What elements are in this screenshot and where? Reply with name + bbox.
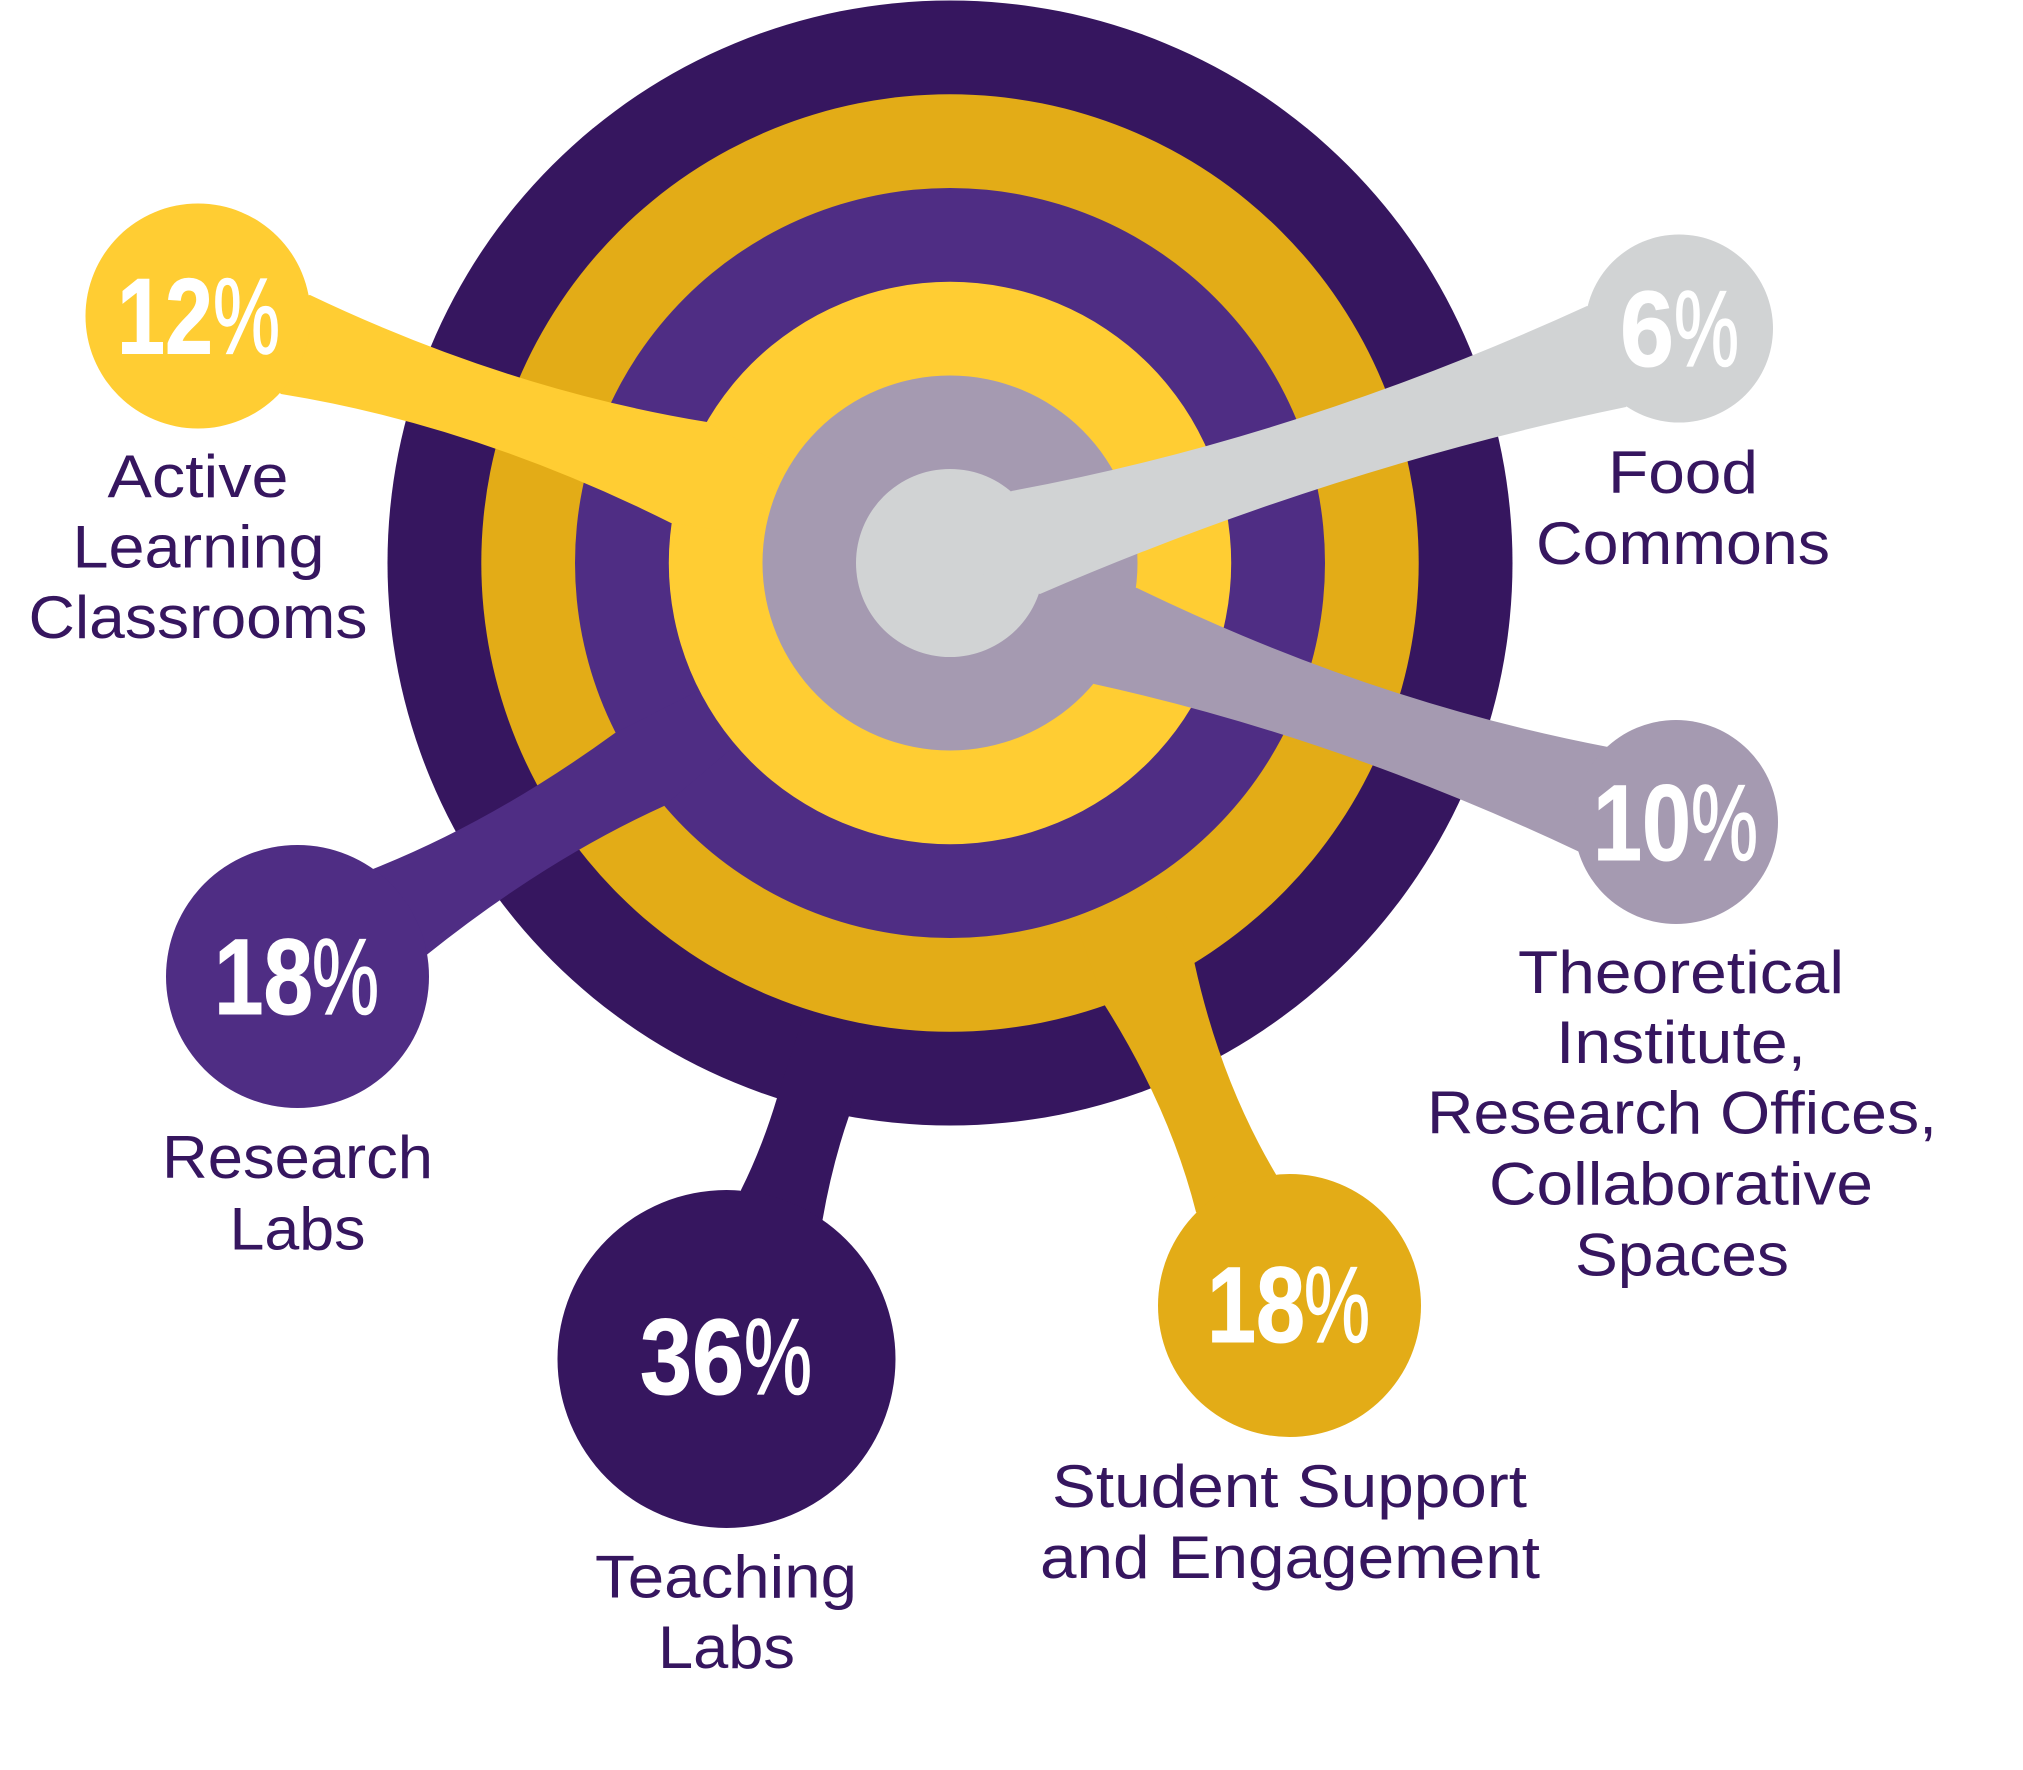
bubble: Food Commons [1585,234,1773,422]
label: Research Labs [162,1124,433,1262]
label: Teaching Labs: Labs [658,1614,795,1681]
percentage: 6%: 6 [1620,268,1674,389]
ring: purple [575,188,1325,938]
percentage: 18% purple: % [312,916,379,1037]
label: Active Learning Classrooms: Learning [72,514,324,580]
connector: Active Learning [198,295,950,563]
percentage: 12%: 12 [117,256,213,376]
percentage: 10%: 10 [1593,762,1691,883]
percentage: 6%: % [1674,268,1739,389]
connector: Theoretical Institute [950,563,1676,852]
label: Student Support and Engagement [1040,1453,1540,1591]
label: Theoretical Institute, Research Offices, Collaborative Spaces: Research Offices, [1427,1080,1937,1147]
label: Theoretical Institute, Research Offices, Collaborative Spaces: Institute, [1556,1009,1806,1076]
connector: Food Commons [950,306,1679,594]
percentage: 18% gold: 18 [1207,1244,1305,1365]
bubble: Active Learning [86,204,310,428]
label: Research Labs: Labs [230,1196,366,1262]
bubble: Student Support [1158,1174,1421,1437]
connector: Research Labs [297,563,950,976]
label: Research Labs: Research [162,1124,433,1191]
label: Student Support and Engagement: and Engagement [1040,1524,1540,1591]
segment: Theoretical Institute 10% [762,376,1937,1288]
ring: outer dark purple [388,0,1512,1126]
percentage: 36%: 36 [640,1296,744,1417]
label: Food Commons: Food [1608,439,1758,506]
label: Theoretical Institute, Research Offices, Collaborative Spaces: Spaces [1575,1222,1789,1288]
ring: light gray centre [856,469,1044,657]
bubble: Research Labs [166,845,429,1108]
connector: Student Support [950,563,1290,1305]
ring: gold [481,94,1419,1032]
segment: Student Support and Engagement 18% [481,94,1540,1591]
segment: Research Labs 18% [162,188,1325,1262]
percentage: 18% gold: % [1304,1244,1370,1365]
percentage: 10%: % [1691,762,1758,883]
percentage: 18% purple: 18 [214,916,313,1037]
ring: yellow [669,282,1231,844]
label: Active Learning Classrooms [28,443,368,651]
label: Theoretical Institute, Research Offices, Collaborative Spaces [1427,939,1937,1288]
label: Teaching Labs: Teaching [595,1544,857,1610]
label: Active Learning Classrooms: Active [108,443,288,510]
label: Food Commons [1536,439,1830,577]
segment: Teaching Labs 36% [388,0,1512,1681]
label: Active Learning Classrooms: Classrooms [28,584,368,651]
ring: mauve [762,376,1138,750]
bubble: Teaching Labs [558,1190,896,1528]
percentage: 12%: % [213,256,280,376]
segment: Food Commons 6% [856,234,1830,657]
label: Theoretical Institute, Research Offices, Collaborative Spaces: Collaborative [1489,1151,1873,1218]
label: Theoretical Institute, Research Offices, Collaborative Spaces: Theoretical [1518,939,1844,1006]
label: Teaching Labs [595,1544,857,1681]
bubble: Theoretical Institute [1574,720,1778,924]
label: Food Commons: Commons [1536,510,1830,577]
segment: Active Learning Classrooms 12% [28,204,1231,844]
percentage: 36%: % [744,1296,812,1417]
connector: Teaching Labs [726,563,950,1359]
label: Student Support and Engagement: Student Support [1052,1453,1527,1520]
